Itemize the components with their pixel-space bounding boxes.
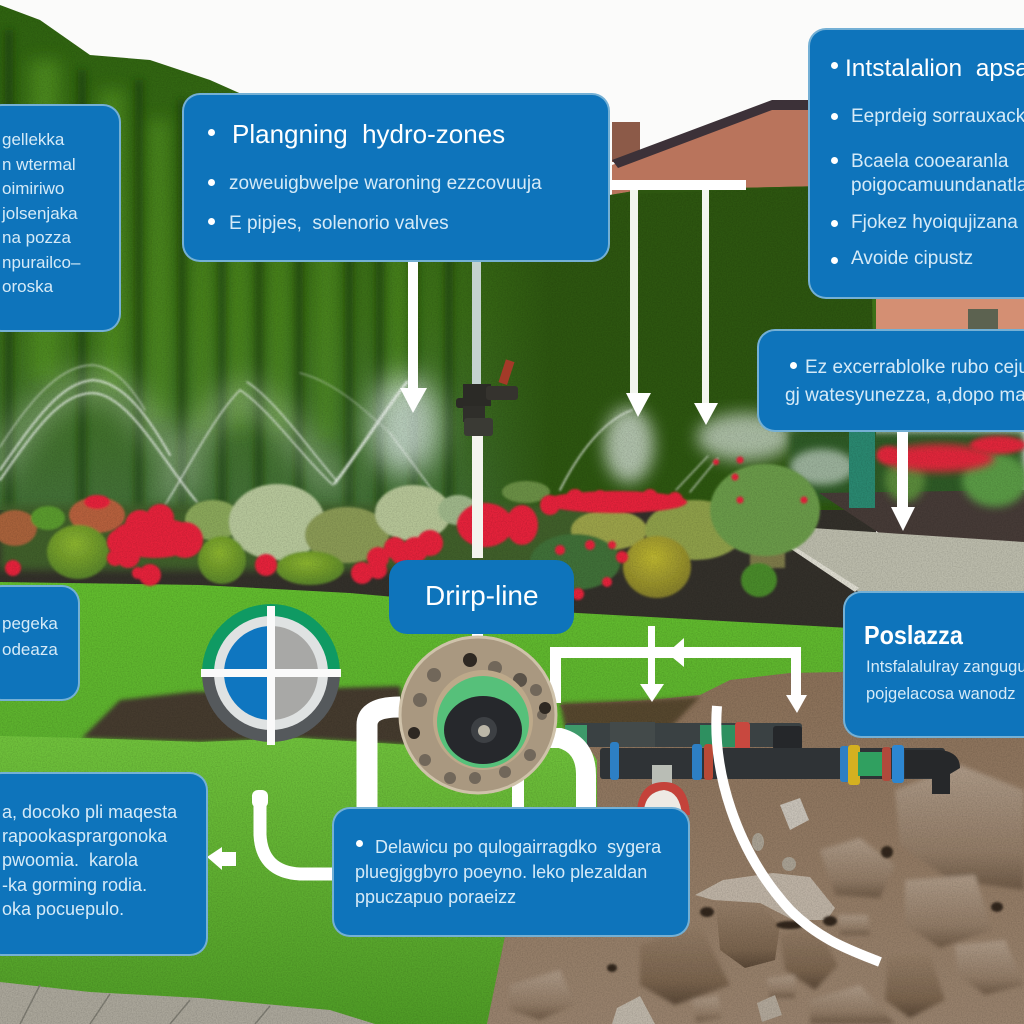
text line: Eeprdeig sorrauxack <box>851 106 1024 127</box>
panel text: na pozza <box>2 228 71 247</box>
text lines: pojgelacosa wanodz <box>866 685 1016 703</box>
soil rocks <box>510 765 1024 1024</box>
text lines <box>355 837 662 907</box>
bullet <box>831 113 838 120</box>
zone diagram icon <box>201 604 341 745</box>
panel text: oroska <box>2 277 53 296</box>
panel text: a, docoko pli maqesta <box>2 802 177 822</box>
panel text: jolsenjaka <box>2 204 78 222</box>
text lines: ppuczapuo poraeizz <box>355 887 516 907</box>
panel text <box>2 614 58 659</box>
text lines <box>851 151 1024 196</box>
bullet <box>831 257 838 264</box>
sprinkler post and head <box>456 261 518 558</box>
backdrop foliage <box>0 505 620 570</box>
upper lawn <box>0 582 850 760</box>
panel: excavation note <box>757 329 1024 432</box>
panel text: pegeka <box>2 614 58 633</box>
soil ground <box>487 668 1024 1024</box>
panel text: odeaza <box>2 640 58 659</box>
panel text: pwoomia. karola <box>2 850 138 870</box>
small arrow to left panel <box>207 847 236 870</box>
bullet <box>208 129 215 136</box>
soil strip <box>82 686 410 745</box>
buried pipework <box>565 722 960 850</box>
text lines: Intsfalalulray zangugu <box>866 658 1024 676</box>
white connector lines and arrows <box>400 180 915 713</box>
panel text: oimiriwo <box>2 179 64 198</box>
soft right garden background <box>785 431 1024 592</box>
panel text: npurailco– <box>2 252 80 272</box>
panel text: gellekka <box>2 130 64 149</box>
text line: E pipjes, solenorio valves <box>229 213 449 234</box>
paving bottom left <box>0 982 375 1024</box>
valve disc <box>399 636 557 794</box>
sky <box>0 0 1024 330</box>
panel text: -ka gorming rodia. <box>2 875 147 895</box>
brick house <box>612 100 1024 332</box>
panel: installation aspects <box>808 28 1024 299</box>
white irrigation tubes <box>260 706 880 962</box>
panel heading: Drirp-line <box>425 580 539 611</box>
text line: Fjokez hyoiqujizana <box>851 212 1018 233</box>
bullet <box>208 179 215 186</box>
dark soil patch <box>560 697 700 728</box>
panel text: n wtermal <box>2 154 76 174</box>
bullet <box>208 218 215 225</box>
flowering shrubs <box>0 456 820 600</box>
bullet <box>356 840 363 847</box>
panel heading: Poslazza <box>864 620 963 650</box>
text lines: Delawicu po qulogairragdko sygera <box>375 837 661 857</box>
text lines <box>866 658 1024 703</box>
panel text: oka pocuepulo. <box>2 899 124 919</box>
panel: bottom-centre notes <box>332 807 690 937</box>
text lines: gj watesyunezza, a,dopo ma <box>785 385 1024 406</box>
lower lawn <box>0 736 600 1024</box>
bullet <box>831 62 838 69</box>
text line: Avoide cipustz <box>851 248 973 269</box>
panel: bottom-left notes <box>0 772 208 956</box>
text lines <box>785 357 1024 406</box>
panel text <box>2 802 178 919</box>
bullet <box>831 157 838 164</box>
text lines: Bcaela cooearanla <box>851 151 1008 172</box>
bullet <box>790 362 797 369</box>
panel: poslazza <box>843 591 1024 738</box>
bullet <box>831 220 838 227</box>
panel: planning hydro-zones <box>182 93 610 262</box>
planting bed soil <box>0 510 876 640</box>
panel: drip-line label <box>389 560 574 634</box>
text lines: poigocamuundanatla <box>851 175 1024 196</box>
panel heading: Plangning hydro-zones <box>232 119 505 149</box>
hedge <box>0 5 880 520</box>
tube collar <box>252 790 268 808</box>
sprinkler spray arcs <box>0 365 793 505</box>
text line: zoweuigbwelpe waroning ezzcovuuja <box>229 173 542 194</box>
panel: left notes <box>0 104 121 332</box>
panel text: rapookasprargonoka <box>2 826 167 846</box>
panel: left small note <box>0 585 80 701</box>
panel heading: Intstalalion apsa <box>845 55 1024 82</box>
panel text <box>2 130 80 296</box>
text lines: pluegjggbyro poeyno. leko plezaldan <box>355 862 647 882</box>
